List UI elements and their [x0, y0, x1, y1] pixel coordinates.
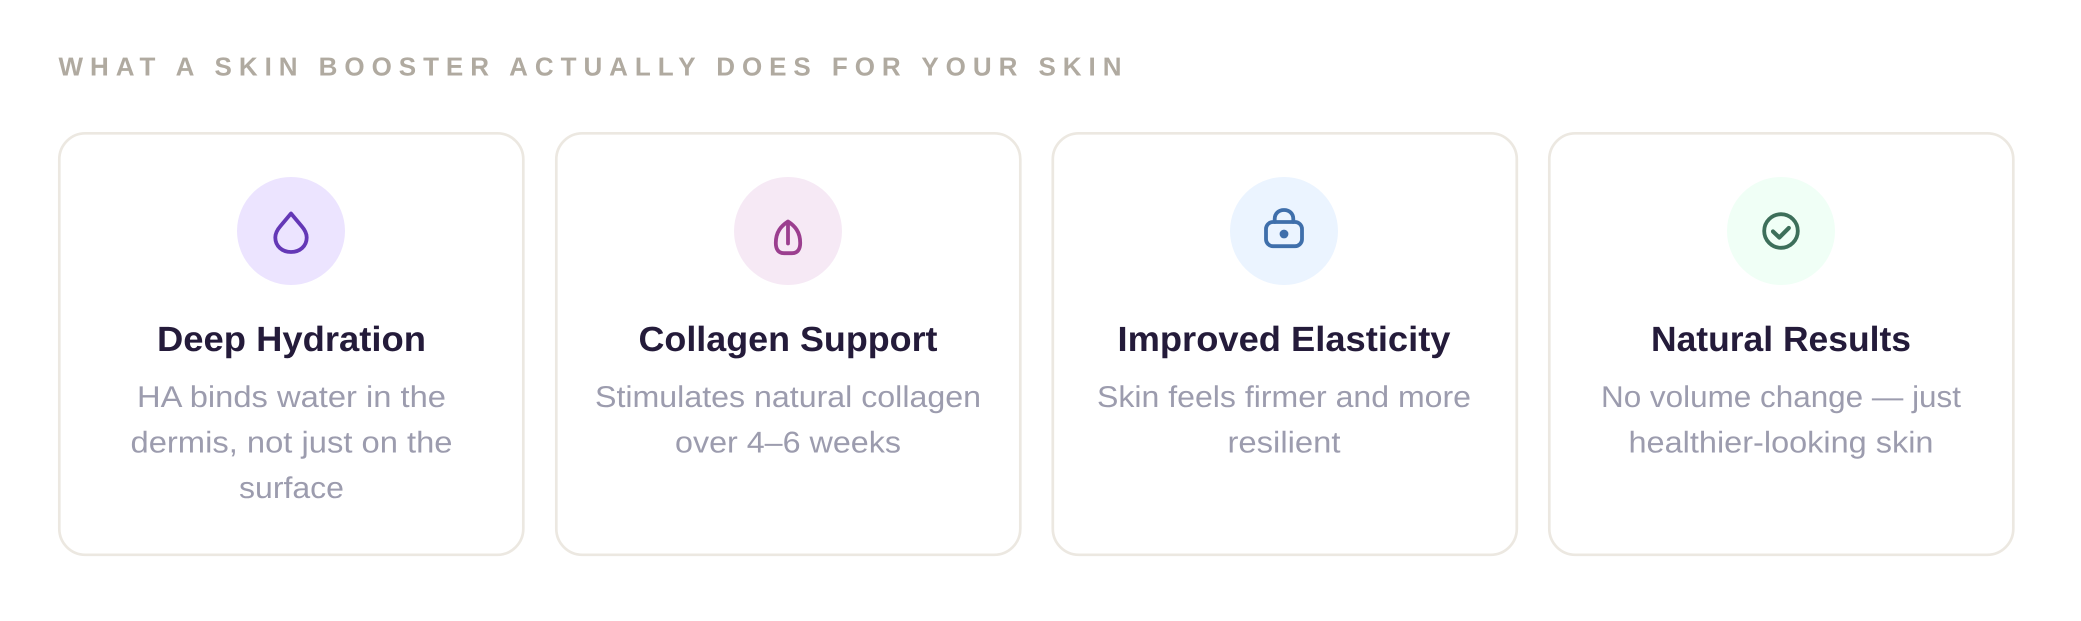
description: collagen support: over 4–6 weeks	[675, 426, 901, 460]
section heading: WHAT A SKIN BOOSTER ACTUALLY DOES FOR YOUR SKIN	[58, 52, 1122, 82]
description: natural results: healthier-looking skin	[1628, 426, 1934, 460]
description: natural results: No volume change — just	[1601, 381, 1962, 414]
description: collagen support	[595, 381, 981, 460]
title: natural results: Natural Results	[1651, 320, 1911, 359]
panel: deep hydration	[59, 133, 523, 555]
description: collagen support: Stimulates natural collagen	[595, 381, 981, 414]
title: collagen support: Collagen Support	[638, 320, 938, 359]
title: improved elasticity: Improved Elasticity	[1118, 320, 1451, 359]
icon: check circle	[1727, 177, 1835, 285]
description: deep hydration: dermis, not just on the	[130, 426, 452, 460]
description: improved elasticity: Skin feels firmer and more	[1097, 381, 1471, 414]
icon: water drop	[237, 177, 345, 285]
description: deep hydration	[130, 381, 452, 505]
title: deep hydration: Deep Hydration	[157, 320, 426, 359]
description: improved elasticity: resilient	[1228, 426, 1341, 460]
description: deep hydration: HA binds water in the	[137, 381, 446, 414]
panel: collagen support	[556, 133, 1020, 555]
description: improved elasticity	[1097, 381, 1471, 460]
icon: leaf	[734, 177, 842, 285]
panel: natural results	[1549, 133, 2013, 555]
icon: lock	[1230, 177, 1338, 285]
description: natural results	[1601, 381, 1962, 460]
panel: improved elasticity	[1053, 133, 1517, 555]
description: deep hydration: surface	[239, 472, 344, 505]
